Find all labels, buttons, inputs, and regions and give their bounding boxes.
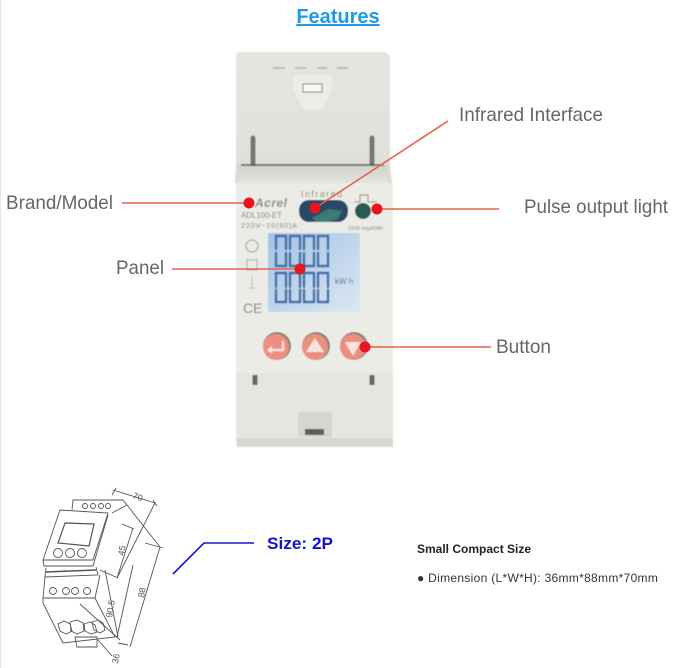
size callout: Size: 2P: [267, 535, 333, 553]
side symbols: [246, 240, 258, 252]
callout: panel: Panel: [116, 257, 164, 279]
brand text: ADL100-ET: [241, 211, 282, 220]
lcd panel: [268, 233, 360, 312]
buttons: [263, 332, 291, 360]
callout: pulse output light: [372, 196, 669, 218]
dimension text: ● Dimension (L*W*H): 36mm*88mm*70mm: [417, 571, 658, 585]
brand text: Acrel: [254, 196, 288, 210]
text: 90.5: [104, 599, 117, 618]
meter upper housing: [235, 52, 392, 183]
text: 45: [116, 545, 128, 556]
callout: infrared interface: [310, 104, 603, 214]
brand text: 1600 imp/kWh: [348, 226, 383, 232]
dimension lines: [112, 488, 157, 506]
title: Features: [296, 6, 380, 28]
text: 36: [110, 653, 122, 664]
device outline: [72, 500, 127, 513]
brand text: Infrared: [301, 189, 342, 199]
callout: button: Button: [496, 336, 551, 358]
callout: infrared interface: Infrared Interface: [459, 104, 603, 126]
dimension labels: 70: [131, 490, 144, 503]
size callout: [173, 535, 333, 574]
callout: brand/model: Brand/Model: [6, 192, 113, 214]
infrared window: [299, 200, 348, 222]
dimension drawing: [43, 488, 163, 656]
energy meter photo: CE: [243, 300, 262, 316]
brand text: 220V~10(80)A: [241, 221, 297, 230]
brand text: [241, 189, 383, 232]
size heading: Small Compact Size: [417, 542, 531, 556]
energy meter photo: [235, 52, 393, 447]
callout: panel: [116, 257, 306, 279]
text: 88: [136, 587, 148, 598]
energy meter photo: kW h: [335, 277, 353, 286]
callout: button: [360, 336, 551, 358]
callout: pulse output light: Pulse output light: [524, 196, 669, 218]
callout: brand/model: [6, 192, 254, 214]
pulse light: [355, 203, 371, 219]
meter lower housing: [236, 373, 393, 447]
